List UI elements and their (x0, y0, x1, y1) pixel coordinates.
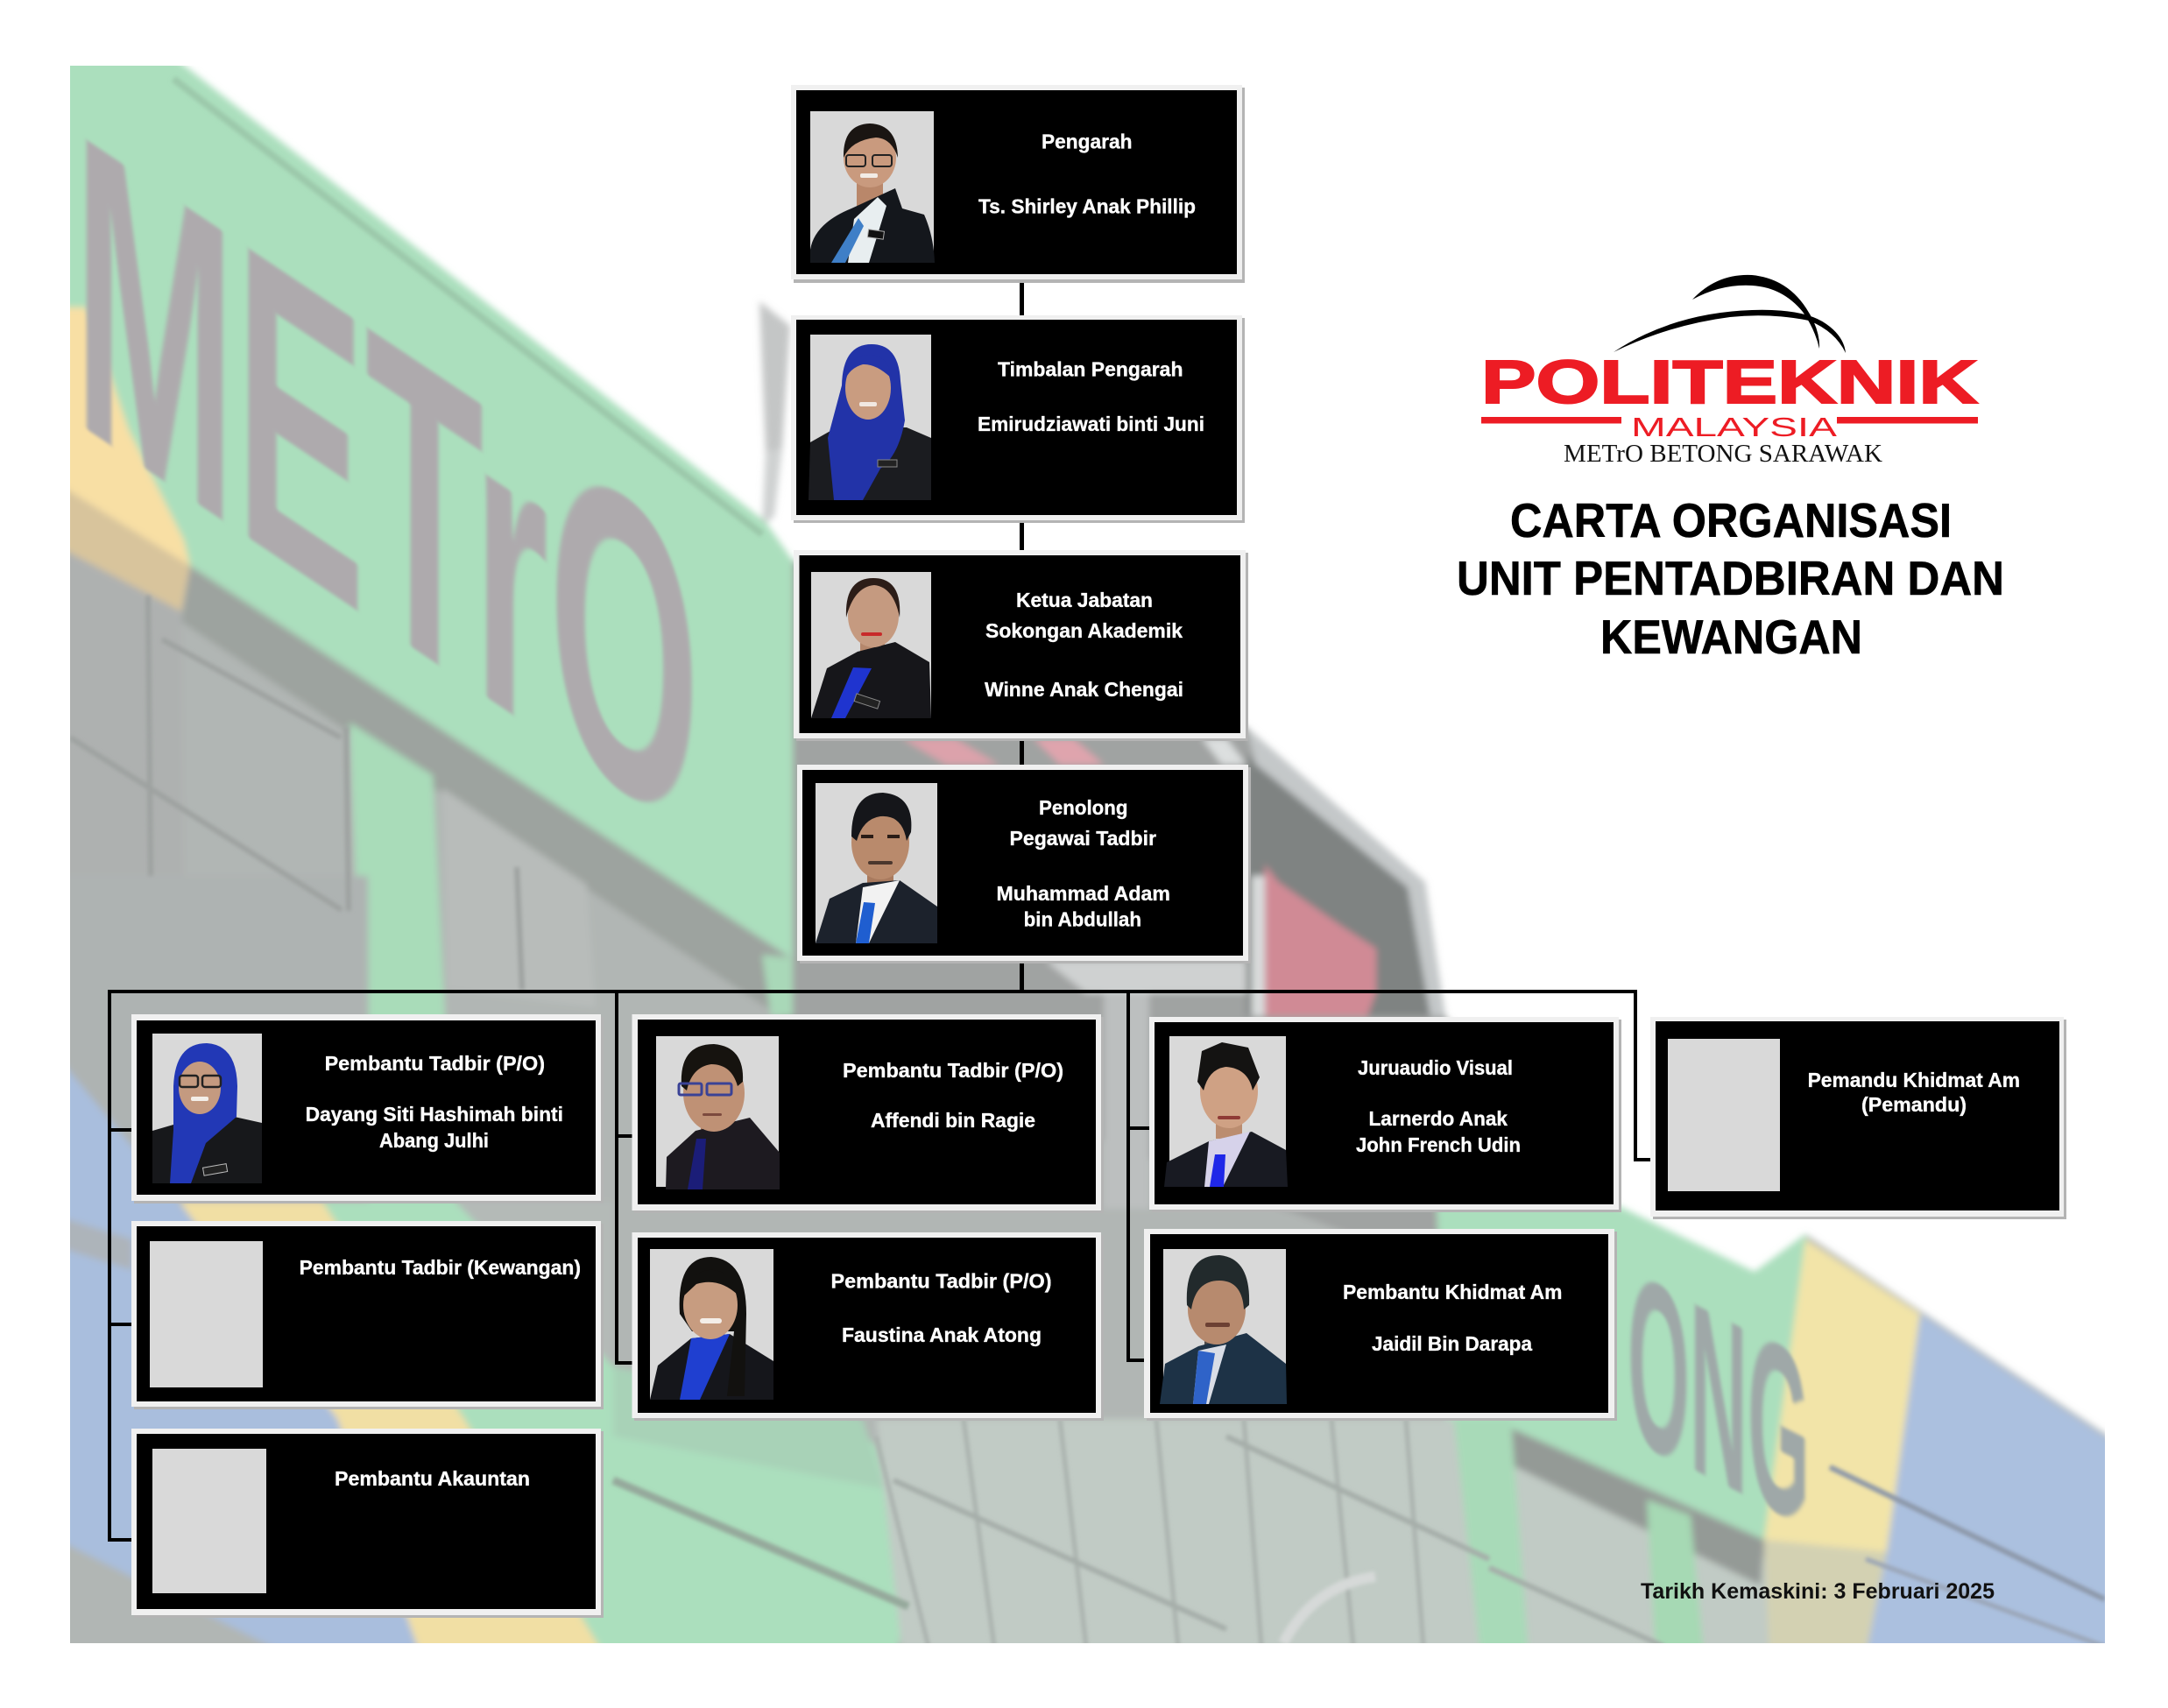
text: Affendi: Affendi bin Ragie (871, 1109, 1035, 1132)
text: Juruaudio (1356, 1056, 1521, 1156)
logo: Malaysia: MALAYSIA (1631, 412, 1837, 442)
card: Juruaudio Visual (1149, 1017, 1621, 1212)
text: Ketua Jabatan (985, 589, 1183, 701)
logo wordmark: POLITEKNIK (1481, 348, 1978, 416)
photo: Larnerdo (1164, 1036, 1288, 1187)
title: KEWANGAN (1600, 610, 1862, 664)
photo: Ts. Shirley (810, 111, 935, 263)
text: Akauntan: Pembantu Akauntan (335, 1467, 530, 1490)
text: Jaidil (1343, 1281, 1563, 1355)
text: Pengarah (978, 130, 1196, 217)
text: Ketua Jabatan: Sokongan Akademik (985, 619, 1183, 642)
text: Dayang: Abang Julhi (379, 1129, 489, 1152)
photo: Faustina (650, 1249, 773, 1400)
card: Pembantu Tadbir (P/O) Dayang (131, 1014, 604, 1203)
logo: Politeknik Malaysia METrO Betong Sarawak (1481, 275, 1978, 468)
card: Pembantu Tadbir (P/O) Affendi (632, 1014, 1104, 1213)
text: Penolong Pegawai Tadbir: Pegawai Tadbir (1009, 827, 1156, 850)
text: Pemandu: Pemandu Khidmat Am (1808, 1069, 2020, 1091)
card: Pembantu Tadbir (Kewangan) (131, 1221, 604, 1409)
text: Penolong Pegawai Tadbir: Penolong (1039, 796, 1128, 819)
text: Juruaudio: Juruaudio Visual (1358, 1056, 1513, 1079)
text: Penolong Pegawai Tadbir (997, 796, 1170, 930)
text: Faustina: Pembantu Tadbir (P/O) (830, 1270, 1051, 1293)
card: Pembantu Akauntan (131, 1429, 604, 1618)
text: Dayang: Dayang Siti Hashimah binti (306, 1103, 563, 1126)
card: Pengarah (791, 85, 1245, 283)
card: Ketua Jabatan (794, 550, 1248, 741)
text: Affendi (843, 1059, 1063, 1132)
card: Penolong Pegawai Tadbir (797, 765, 1251, 963)
text: Ketua Jabatan: Winne Anak Chengai (985, 678, 1183, 701)
text: Timbalan Pengarah: Emirudziawati binti Juni (978, 413, 1204, 435)
card: Pembantu Khidmat Am (1144, 1229, 1617, 1421)
photo: Dayang (152, 1034, 262, 1183)
text: Affendi: Pembantu Tadbir (P/O) (843, 1059, 1063, 1082)
logo: campus name: METrO BETONG SARAWAK (1564, 441, 1882, 468)
text: Timbalan Pengarah: Timbalan Pengarah (998, 357, 1183, 380)
title: UNIT PENTADBIRAN DAN (1457, 551, 2004, 605)
text: Juruaudio: John French Udin (1356, 1133, 1521, 1156)
background: faded building photograph: METrO (74, 39, 700, 929)
card: Pemandu Khidmat Am (1650, 1017, 2066, 1219)
card: Timbalan Pengarah (791, 315, 1245, 523)
text: Kewangan: Pembantu Tadbir (Kewangan) (300, 1256, 581, 1279)
card: Pembantu Tadbir (P/O) Faustina (632, 1232, 1104, 1421)
photo placeholder (152, 1449, 266, 1593)
text: Pemandu (1808, 1069, 2020, 1116)
text: Jaidil: Pembantu Khidmat Am (1343, 1281, 1563, 1303)
text: Ketua Jabatan: Ketua Jabatan (1016, 589, 1153, 611)
title (1457, 493, 2004, 664)
text: Pengarah: Ts. Shirley Anak Phillip (978, 194, 1196, 217)
text: Penolong Pegawai Tadbir: bin Abdullah (1024, 907, 1141, 930)
text: Pemandu: (Pemandu) (1861, 1093, 1967, 1116)
text: Dayang: Pembantu Tadbir (P/O) (325, 1052, 545, 1075)
icon: logo arcs (1614, 275, 1846, 353)
text: Pengarah: Pengarah (1042, 130, 1132, 152)
photo: Muhammad Adam (816, 783, 937, 943)
photo: Winne (811, 572, 931, 718)
photo placeholder (1668, 1039, 1780, 1191)
photo placeholder (150, 1241, 263, 1387)
text: Faustina (830, 1270, 1051, 1346)
connector lines (108, 279, 1650, 1542)
text: Timbalan Pengarah (978, 357, 1204, 435)
title: CARTA ORGANISASI (1510, 493, 1952, 547)
text: Dayang (306, 1052, 563, 1152)
text: Faustina: Faustina Anak Atong (842, 1323, 1042, 1346)
update date: Tarikh Kemaskini: 3 Februari 2025 (1641, 1579, 1995, 1604)
text: Juruaudio: Larnerdo Anak (1368, 1107, 1508, 1130)
photo: Jaidil (1160, 1249, 1287, 1404)
photo: Emirudziawati (809, 335, 931, 500)
text: Jaidil: Jaidil Bin Darapa (1372, 1332, 1532, 1355)
text: Penolong Pegawai Tadbir: Muhammad Adam (997, 882, 1170, 905)
photo: Affendi (656, 1036, 780, 1189)
